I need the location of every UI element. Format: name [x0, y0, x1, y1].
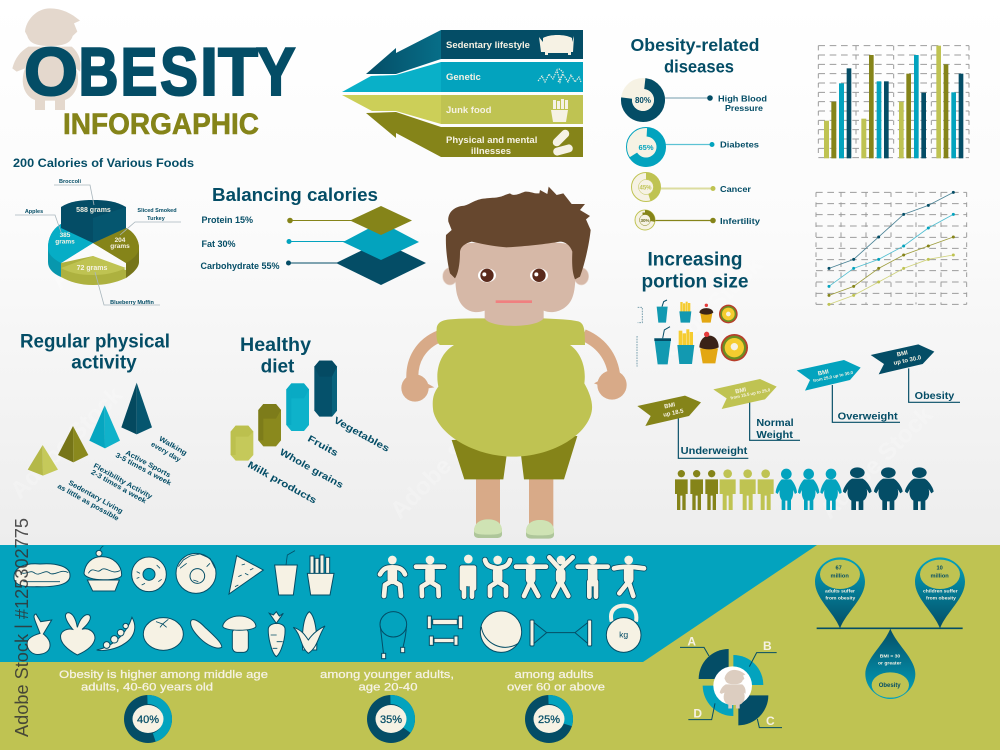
icon: sack: [27, 614, 52, 655]
heading: diseases: Obesity-related: [630, 35, 760, 55]
title: T: [218, 34, 258, 110]
watermark: Adobe Stock: [775, 21, 898, 144]
chart: 30% donut: [635, 210, 655, 230]
text: disease labels: Cancer: [720, 184, 752, 194]
illustration: obese boy: [401, 187, 627, 539]
chart: 80% donut: 80%: [635, 96, 651, 105]
chart: 3D pie: 72 grams: [77, 265, 107, 272]
chart: balance scale with pins: [815, 557, 965, 699]
panel: bottom lime band: [0, 545, 1000, 750]
icon: fries: [551, 99, 568, 122]
flag: overweight: BMI: [817, 369, 830, 377]
chart: 3D pie: 204: [115, 237, 126, 244]
eyes: [478, 268, 548, 282]
flag: normal weight: BMI: [735, 387, 747, 395]
pin: children: from obesity: [926, 595, 956, 601]
icons: exercise equipment: [380, 606, 641, 659]
chart: 3D pie: grams: [110, 243, 130, 250]
pin: BMI 30 obesity: or greater: [878, 661, 901, 667]
title: [24, 34, 296, 110]
icon: kettlebell: kg: [619, 629, 628, 639]
text: disease labels: [718, 94, 767, 226]
icon: bagel: [176, 553, 216, 593]
text: causes: illnesses: [471, 146, 511, 157]
pin: BMI 30 obesity: BMI = 30: [880, 653, 900, 659]
hair: [446, 187, 591, 279]
panel: regular physical activity: [20, 332, 188, 523]
flag: obesity: up to 30.0: [893, 355, 922, 367]
flag: obesity: BMI: [896, 350, 909, 358]
flag: underweight: up 18.5: [663, 408, 685, 419]
arrow: sedentary lifestyle: [366, 30, 583, 74]
icon: exercise ball: [480, 611, 522, 652]
pin: children: million: [931, 574, 949, 580]
chart: 25% donut: [525, 695, 573, 743]
heading: physical activity: activity: [71, 352, 137, 374]
text: older adults: [507, 669, 605, 694]
chart: 65% donut: 65%: [638, 143, 654, 152]
pin: BMI 30 obesity: [865, 629, 915, 699]
flag: underweight: Underweight: [681, 446, 748, 457]
chart: 65% donut: [626, 128, 666, 166]
watermark: Adobe Stock: [815, 401, 938, 524]
chart: stacked diamonds: [336, 206, 426, 285]
panel: bottom teal band: [0, 545, 817, 662]
text: younger adults: [320, 669, 454, 694]
icon: mushroom: [223, 616, 256, 652]
arrow: physical and mental illnesses: [366, 112, 583, 157]
chart: 3D pie: 385: [60, 232, 71, 239]
chart: ABCD ring: B: [763, 639, 772, 653]
chart: bar chart: [818, 46, 969, 158]
shoes: [474, 519, 554, 539]
text: nutrient shares: Protein 15%: [202, 215, 253, 225]
icon: cucumber: [191, 620, 222, 648]
text: middle age adults: [59, 669, 268, 694]
title: S: [160, 34, 198, 110]
face: [455, 241, 575, 326]
text: disease labels: Pressure: [725, 103, 763, 113]
icon: dna wave: [538, 68, 581, 82]
chart: ABCD ring: C: [766, 714, 775, 728]
chart: 3D pie: Sliced Smoked: [137, 208, 177, 214]
legs: [476, 477, 553, 527]
text: diet labels: Vegetables: [332, 415, 391, 455]
chart: 45% donut: 45%: [639, 186, 652, 192]
text: activity labels: [56, 436, 188, 523]
chart: 3D pie: Broccoli: [59, 179, 81, 185]
icon: jump rope: [380, 612, 407, 659]
arms: [412, 335, 615, 383]
icon: dumbbells: [427, 616, 463, 645]
text: activity labels: as little as possible: [56, 483, 120, 523]
pin: adults: [815, 557, 865, 628]
flag: overweight: [797, 360, 900, 422]
text: disease labels: Diabetes: [720, 140, 759, 150]
icon: cup: [275, 551, 297, 595]
chart: ABCD ring: [680, 634, 782, 728]
heading: balancing calories: Balancing calories: [212, 185, 378, 205]
text: activity labels: every day: [150, 441, 182, 464]
chart: 3D pie: Apples: [25, 209, 43, 215]
flag: normal weight: from 18.5 up to 25.0: [730, 387, 771, 401]
icon: title silhouette: [12, 8, 81, 110]
text: causes: Genetic: [446, 72, 481, 83]
chart: ABCD ring: A: [687, 634, 696, 648]
connector lines: [286, 218, 360, 266]
chart: 3D pie: 588 grams: [76, 207, 111, 214]
icon: kettlebell: [606, 606, 641, 652]
text: causes: Sedentary lifestyle: [446, 40, 530, 51]
text: middle age adults: Obesity is higher among middle age: [59, 669, 268, 681]
shorts: [452, 436, 577, 479]
pin: adults: from obesity: [825, 595, 856, 601]
chart: 35% donut: [367, 695, 415, 743]
icons: exercise figures: [380, 555, 644, 597]
watermark: [5, 0, 938, 524]
heading: calories: 200 Calories of Various Foods: [13, 158, 194, 170]
heading: increasing portion size: [642, 250, 748, 292]
arrow: junk food: [342, 95, 583, 124]
text: diet labels: [246, 415, 391, 506]
pin: BMI 30 obesity: Obesity: [879, 683, 901, 689]
text: older adults: among adults: [514, 669, 594, 681]
icon: pea pod: [97, 617, 135, 651]
pin: adults: 67: [836, 565, 842, 571]
shirt: [433, 318, 592, 457]
panel: balancing calories: [200, 185, 426, 285]
text: nutrient shares: Fat 30%: [202, 239, 236, 249]
text: disease labels: Infertility: [720, 216, 760, 226]
heading: healthy diet: [240, 335, 311, 378]
text: younger adults: among younger adults,: [320, 669, 454, 681]
panel: obesity-related diseases: [621, 35, 767, 230]
heading: healthy diet: Healthy: [240, 335, 311, 356]
chart: prisms: [231, 361, 337, 461]
pin: children: 10: [937, 565, 943, 571]
icon: tomato: [143, 618, 183, 650]
chart: 80% donut: [621, 78, 665, 122]
heading: physical activity: Regular physical: [20, 332, 170, 352]
pin: children: [915, 557, 965, 628]
chart: 40% donut: [124, 695, 172, 743]
icon: beet: [61, 613, 95, 655]
flag: obesity: [871, 344, 960, 402]
chart: 3D pie: Turkey: [147, 216, 166, 222]
icon: pizza: [229, 556, 263, 594]
icons: food row: [14, 546, 334, 657]
title: E: [120, 34, 158, 110]
watermark: Adobe Stock: [5, 381, 128, 504]
arrow: genetic: [342, 62, 583, 92]
chart: 3D pie: grams: [55, 238, 75, 246]
text: nutrient shares: Carbohydrate 55%: [200, 261, 280, 271]
flag: overweight: Overweight: [838, 411, 899, 422]
text: disease labels: High Blood: [718, 94, 767, 104]
title: O: [24, 34, 78, 110]
text: activity labels: Sedentary Living: [67, 480, 124, 515]
icon: sandwich: [14, 564, 70, 587]
text: diet labels: Fruits: [306, 434, 340, 459]
text: causes: Junk food: [446, 105, 492, 116]
icon: donut: [132, 557, 166, 592]
chart: 30% donut: 30%: [640, 218, 650, 223]
panel: BMI flags: [637, 344, 960, 458]
mouth: [496, 300, 532, 303]
flag: normal weight: Normal: [756, 418, 794, 429]
heading: diseases: diseases: [664, 56, 734, 76]
pin: children: children suffer: [923, 588, 958, 594]
text: younger adults: age 20-40: [358, 682, 418, 694]
title: I: [200, 34, 218, 110]
icon: corn: [293, 612, 325, 653]
flag: underweight: BMI: [664, 402, 676, 410]
hands: [401, 370, 627, 402]
subtitle: INFORGAPHIC: [63, 108, 259, 141]
heading: increasing portion size: Increasing: [648, 250, 742, 270]
text: causes: [446, 40, 537, 157]
flag: obesity: Obesity: [915, 391, 955, 402]
text: middle age adults: adults, 40-60 years old: [81, 682, 213, 694]
text: activity labels: 2-3 times a week: [90, 469, 147, 505]
title: B: [78, 34, 118, 110]
text: causes: Physical and mental: [446, 135, 537, 146]
chart: 25% donut: 25%: [538, 714, 560, 726]
icon: sofa: [539, 35, 574, 55]
watermark: Adobe Stock: [45, 171, 168, 294]
pin: adults: million: [831, 574, 849, 580]
text: activity labels: Active Sports: [124, 450, 172, 479]
heading: physical activity: [20, 332, 170, 374]
panel: healthy diet: [231, 335, 391, 506]
text: diet labels: Whole grains: [278, 447, 345, 491]
heading: healthy diet: diet: [261, 356, 295, 378]
chart: 35% donut: 35%: [380, 714, 402, 726]
chart: 40% donut: 40%: [137, 714, 159, 726]
watermark: Adobe Stock: [495, 111, 618, 234]
icon: resistance band: [530, 620, 592, 646]
text: activity labels: Flexibility Activity: [92, 463, 153, 501]
icon: pills: [551, 128, 574, 156]
panel: 200 calories of various foods: [13, 158, 194, 306]
heading: diseases: [630, 35, 760, 76]
text: nutrient shares: [200, 215, 280, 271]
icon: carrot: [268, 612, 285, 657]
chart: pyramids: [28, 383, 152, 476]
pin: adults: adults suffer: [825, 588, 855, 594]
chart: ABCD ring: D: [693, 707, 702, 721]
icon: fries: [307, 555, 334, 595]
connector lines: [655, 95, 716, 223]
chart: 3D pie: [15, 179, 181, 306]
icons: portion sizes: [637, 300, 748, 366]
watermark: stock id: Adobe Stock | #125302775: [12, 518, 32, 737]
text: older adults: over 60 or above: [507, 682, 605, 694]
text: activity labels: Walking: [158, 436, 188, 457]
flag: overweight: from 25.0 up to 30.0: [813, 370, 854, 383]
chart: 45% donut: [632, 172, 660, 202]
panel: causes arrows: [342, 30, 583, 157]
flag: normal weight: Weight: [756, 430, 794, 441]
title: Y: [256, 34, 296, 110]
text: diet labels: Milk products: [246, 460, 318, 506]
chart: line chart: [816, 191, 967, 306]
watermark: Adobe Stock: [385, 401, 508, 524]
text: activity labels: 3-5 times a week: [114, 452, 172, 487]
ears: [443, 268, 589, 285]
icons: body types row: [675, 467, 934, 510]
flag: underweight: [637, 396, 748, 458]
flag: normal weight: [713, 379, 800, 441]
watermark: Adobe: [5, 2, 77, 74]
watermark: Adobe Stock: [645, 251, 768, 374]
icon: cupcake: [84, 546, 122, 591]
chart: 3D pie: Blueberry Muffin: [110, 300, 154, 306]
heading: increasing portion size: portion size: [642, 272, 748, 292]
